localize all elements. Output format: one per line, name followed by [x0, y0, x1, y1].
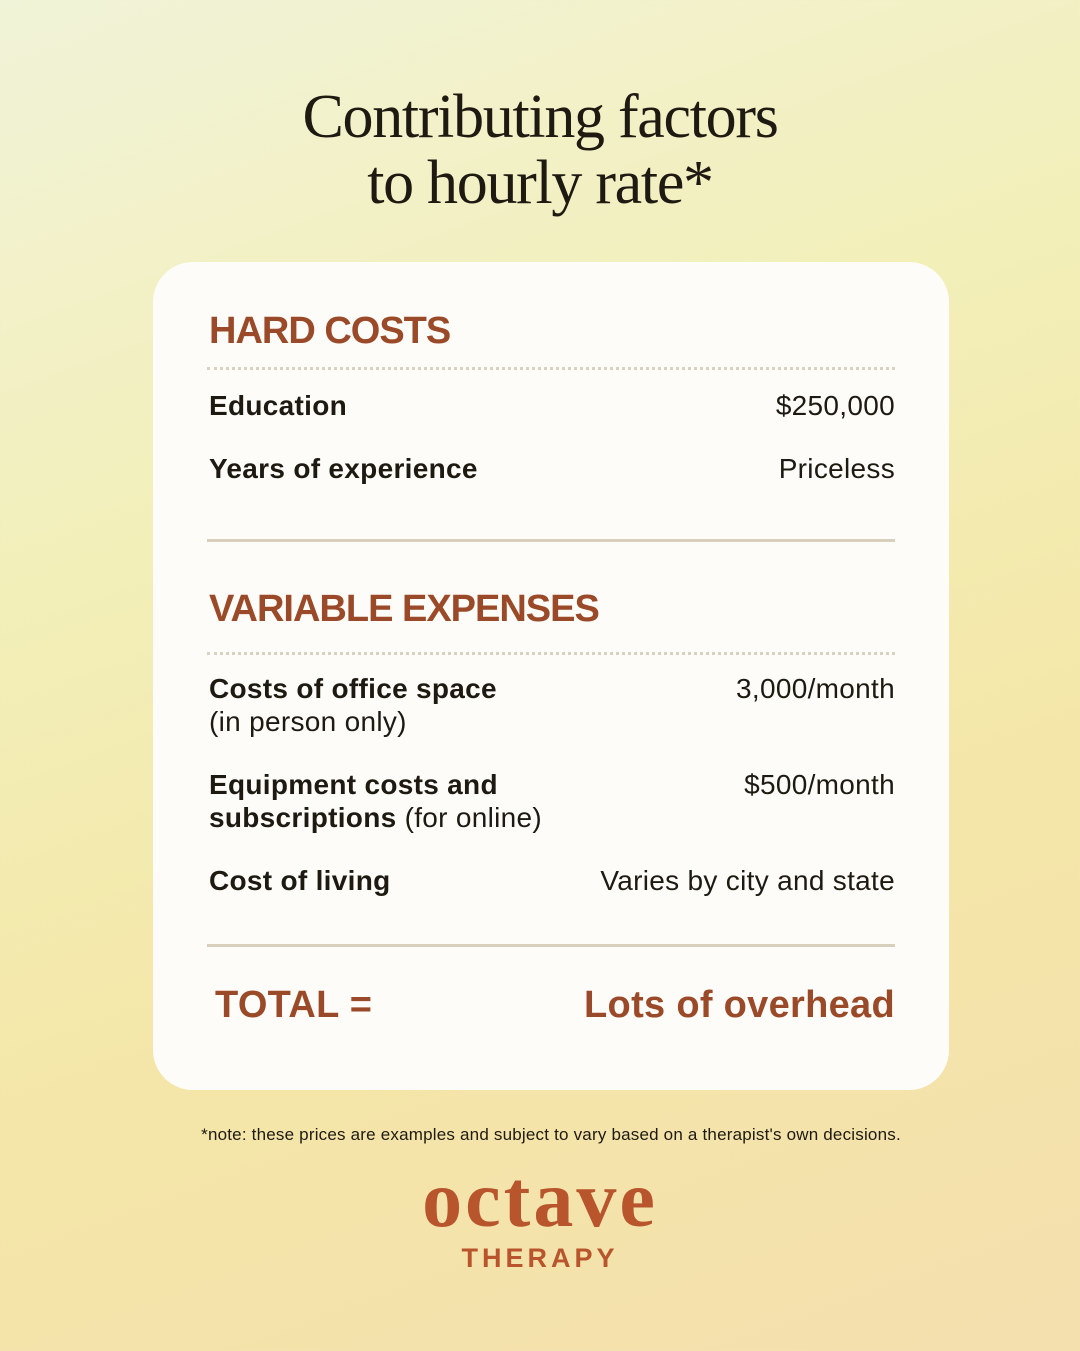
row: cost of living: [209, 865, 895, 896]
heading: variable expenses: VARIABLE EXPENSES: [209, 588, 599, 630]
footnote: *note: these prices are examples and subject to vary based on a therapist's own decisions.: [201, 1125, 901, 1144]
row: equipment: Equipment costs and: [209, 769, 498, 800]
row: experience: Years of experience: [209, 453, 478, 484]
row: office space: Costs of office space: [209, 673, 497, 704]
row: office space: [209, 673, 895, 737]
logo: octave: [422, 1156, 658, 1244]
row: education: Education: [209, 390, 347, 421]
total: TOTAL =: [215, 984, 372, 1026]
row: office space: (in person only): [209, 706, 407, 737]
title: to hourly rate*: [367, 149, 713, 217]
title: Contributing factors: [302, 83, 778, 151]
row: cost of living: Varies by city and state: [600, 865, 895, 896]
title: [302, 83, 778, 217]
row: equipment: $500/month: [744, 769, 895, 800]
row: experience: [209, 453, 895, 484]
logo subtitle: THERAPY: [461, 1243, 618, 1273]
heading: hard costs: HARD COSTS: [209, 310, 450, 352]
row: education: $250,000: [776, 390, 895, 421]
row: cost of living: Cost of living: [209, 865, 391, 896]
row: education: [209, 390, 895, 421]
row: office space: 3,000/month: [736, 673, 895, 704]
panel: cost card: [153, 262, 949, 1090]
total: Lots of overhead: [584, 984, 895, 1026]
row: equipment: subscriptions (for online): [209, 802, 542, 833]
row: equipment: [209, 769, 895, 833]
total: [215, 984, 895, 1026]
row: experience: Priceless: [779, 453, 895, 484]
